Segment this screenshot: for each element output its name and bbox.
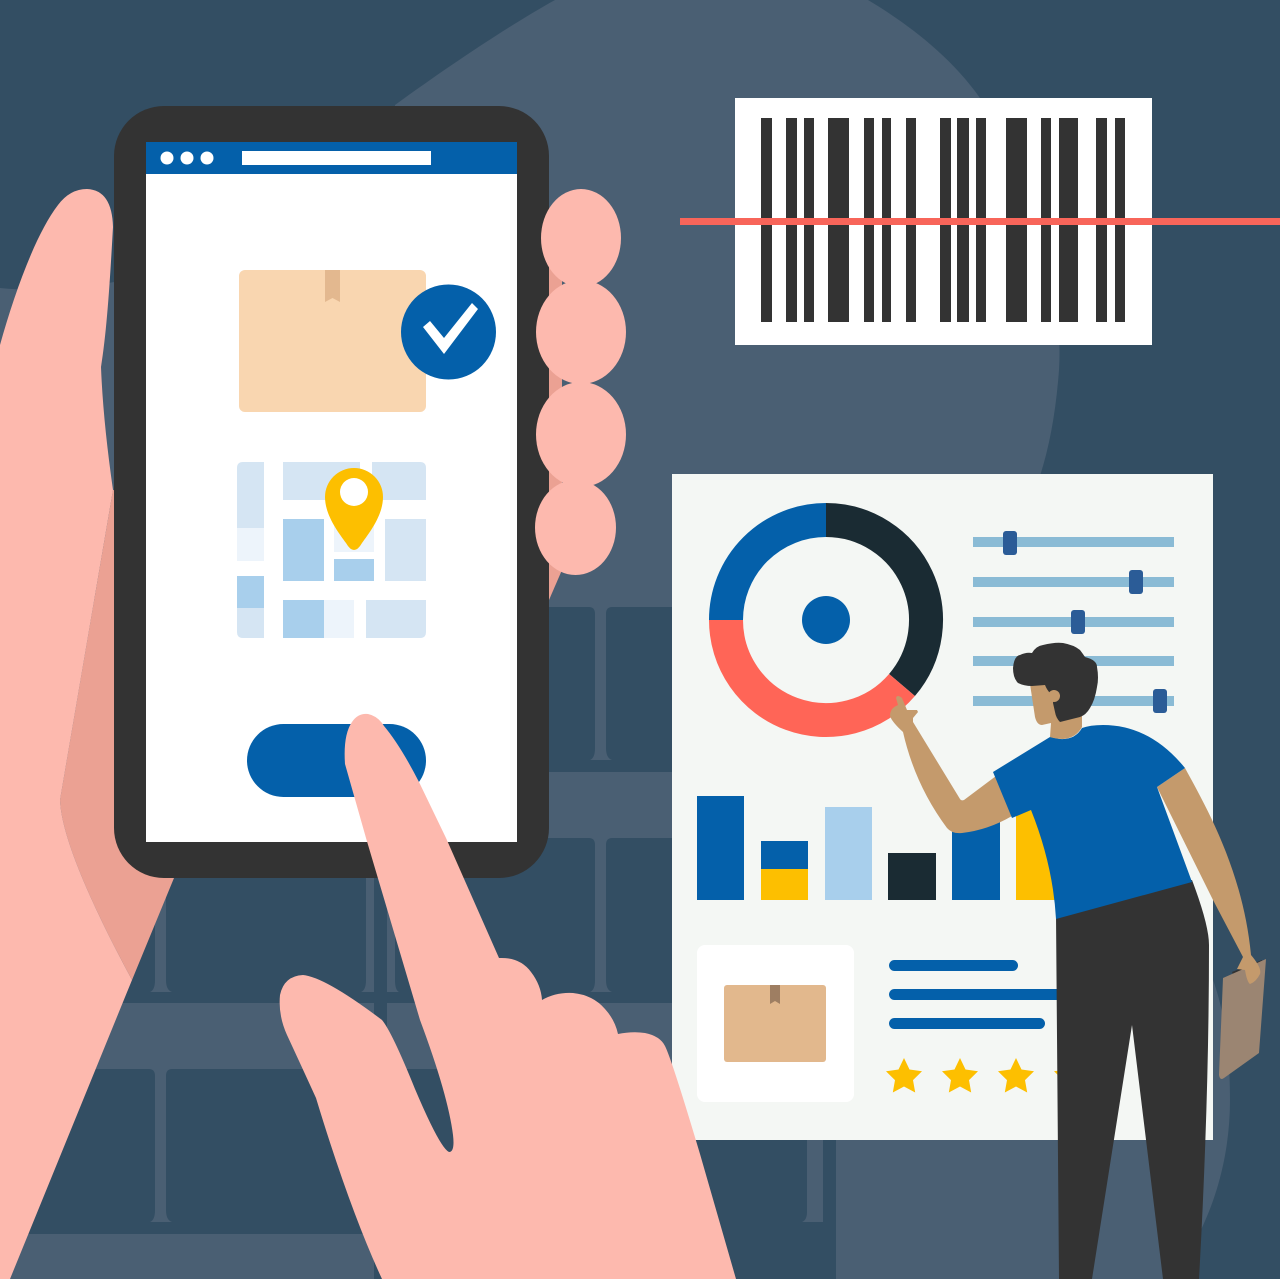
map bbox=[237, 462, 426, 638]
browser header bbox=[146, 142, 517, 174]
clipboard clip bbox=[1232, 960, 1262, 977]
hair bbox=[1013, 643, 1098, 722]
icon: check badge bbox=[401, 284, 496, 380]
clipboard bbox=[1219, 959, 1266, 1079]
ear bbox=[1048, 690, 1060, 702]
right hand fingers bbox=[535, 189, 626, 600]
button bbox=[247, 724, 426, 797]
icon: location pin bbox=[325, 468, 383, 550]
shirt bbox=[993, 725, 1192, 919]
neck and face bbox=[1030, 680, 1082, 739]
barcode bbox=[680, 98, 1280, 345]
person bbox=[890, 643, 1266, 1279]
panel: dashboard bbox=[672, 474, 1213, 1140]
parcel icon bbox=[239, 270, 426, 412]
donut chart bbox=[726, 520, 926, 720]
star rating bbox=[886, 1058, 1090, 1093]
bar chart bbox=[697, 796, 1061, 900]
description lines bbox=[889, 960, 1069, 1029]
scanner line bbox=[680, 218, 1280, 225]
left hand holding phone bbox=[0, 189, 132, 1279]
arm: right bbox=[1157, 768, 1260, 984]
right hand tapping bbox=[280, 714, 736, 1279]
arm: left, pointing bbox=[890, 696, 1012, 833]
sliders bbox=[973, 531, 1174, 713]
left hand palm shadow bbox=[60, 490, 220, 980]
pants bbox=[1056, 880, 1209, 1279]
product card bbox=[697, 945, 854, 1102]
phone bbox=[114, 106, 549, 878]
